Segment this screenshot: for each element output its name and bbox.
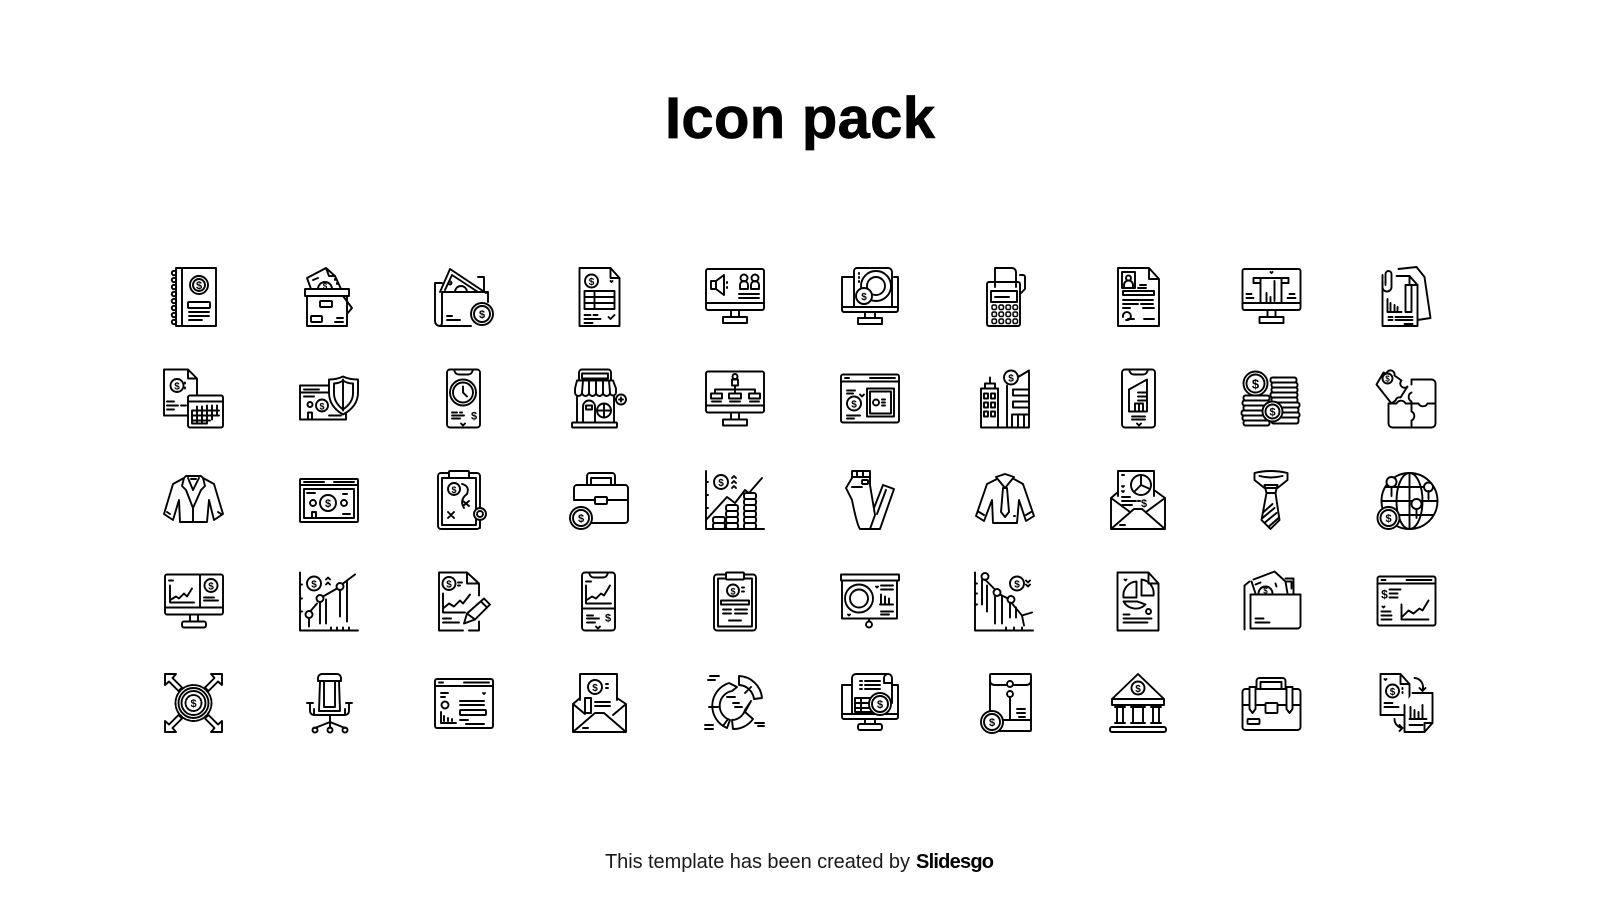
icon: browser report [435,679,493,728]
icon: coin with four arrows: $ [190,698,197,710]
icon: clipboard invoice [714,572,756,630]
icon: office chair [307,674,352,732]
icon: bank building [1110,674,1166,732]
icon: projector screen [841,574,899,628]
icon: shirt with tie [976,474,1034,523]
icon: browser with shield: $ [319,402,325,412]
icon: rising line chart: $ [311,580,317,590]
icon: rising line chart [300,572,358,630]
icon: coin with four arrows [165,674,222,732]
icon: coin stacks: $ [1269,406,1276,418]
icon: box with money [305,268,352,326]
icon: phone with stock chart [582,572,615,630]
icon: leather briefcase [1242,678,1300,730]
icon: monitor with org chart [706,372,764,426]
icon: coin stacks [1242,372,1300,426]
icon: wallet with banknotes and coin: $ [479,309,485,321]
icon: necktie [1254,471,1288,529]
icon: document with table: $ [589,277,595,288]
icon: monitor with ATM [1242,269,1300,323]
icon: string envelope with coin [981,674,1031,733]
icon: box with money: $ [323,282,328,291]
icon: browser with shield [300,376,358,420]
icon: document with pie chart [1118,572,1158,630]
icon: monitor with donut chart and coin: $ [861,292,867,303]
icon: envelope with letter: $ [592,683,598,694]
icon: document with pencil [439,572,490,630]
icon: folder with money [1244,572,1300,630]
icon: document and calendar [164,370,223,428]
icon: coin stacks: $ [1252,376,1260,392]
icon: puzzle pieces [1376,370,1436,428]
icon: notebook with coin [172,268,216,326]
icon: envelope with pie chart [1111,471,1165,529]
icon: document with pencil: $ [446,580,452,590]
icon: string envelope with coin: $ [989,717,995,729]
icon: suit jacket [164,476,223,522]
icon: browser with safe [841,374,899,422]
icon: monitor with document and coin [842,674,898,730]
icon: puzzle pieces: $ [1385,374,1390,384]
icon: banknote window: $ [325,498,331,510]
icon: browser with chart: $ [1381,588,1388,602]
icon: monitor with document and coin: $ [877,699,883,711]
icon: briefcase with coin: $ [578,513,584,525]
icon: clipboard treasure map [438,471,486,529]
icon: browser with chart [1378,576,1436,626]
icon: clipped report [1382,267,1430,326]
footer credit: This template has been created by [605,851,910,873]
icon: browser with safe: $ [851,400,857,410]
icon: exchanged documents [1380,674,1432,732]
icon: globe with pins and coin: $ [1385,513,1392,525]
icon: phone with building [1122,370,1155,428]
icon: folder with money: $ [1263,586,1268,596]
icon: phone with clock: $ [471,410,477,422]
footer credit: Slidesgo [916,851,994,873]
icon: buildings with coin: $ [1008,374,1014,384]
icon: monitor with stock chart: $ [208,582,214,592]
icon grid [164,267,1438,733]
icon: growth chart with coins [706,471,764,529]
icon: monitor with stock chart [165,574,223,628]
icon: trousers [846,471,894,529]
icon: falling line chart: $ [1014,580,1020,590]
icon: document and calendar: $ [174,382,180,392]
icon: phone with clock [447,370,480,428]
icon: phone with stock chart: $ [605,612,611,624]
icon: briefcase with coin [570,473,628,529]
icon: growth chart with coins: $ [718,478,724,489]
icon: monitor with megaphone [706,269,764,323]
icon: exchanged documents: $ [1390,687,1396,698]
icon: bank building: $ [1135,684,1141,695]
icon: resume document [1118,268,1159,326]
icon: segmented donut chart [705,676,764,729]
icon: envelope with pie chart: $ [1141,498,1147,510]
icon: monitor with donut chart and coin [842,268,898,324]
icon: banknote window [300,479,358,522]
icon: clipboard invoice: $ [730,586,736,596]
icon: falling line chart [975,572,1033,630]
icon: envelope with letter [573,674,626,732]
icon: notebook with coin: $ [196,280,202,292]
icon: clipboard treasure map: $ [451,485,457,495]
icon: wallet with banknotes and coin [435,269,493,326]
icon: calculator with receipt [987,268,1025,326]
icon: globe with pins and coin [1378,473,1438,529]
icon: document with table [580,268,620,326]
icon: shop [572,370,626,428]
icon: buildings with coin [981,370,1029,428]
title: Icon pack [665,86,936,151]
